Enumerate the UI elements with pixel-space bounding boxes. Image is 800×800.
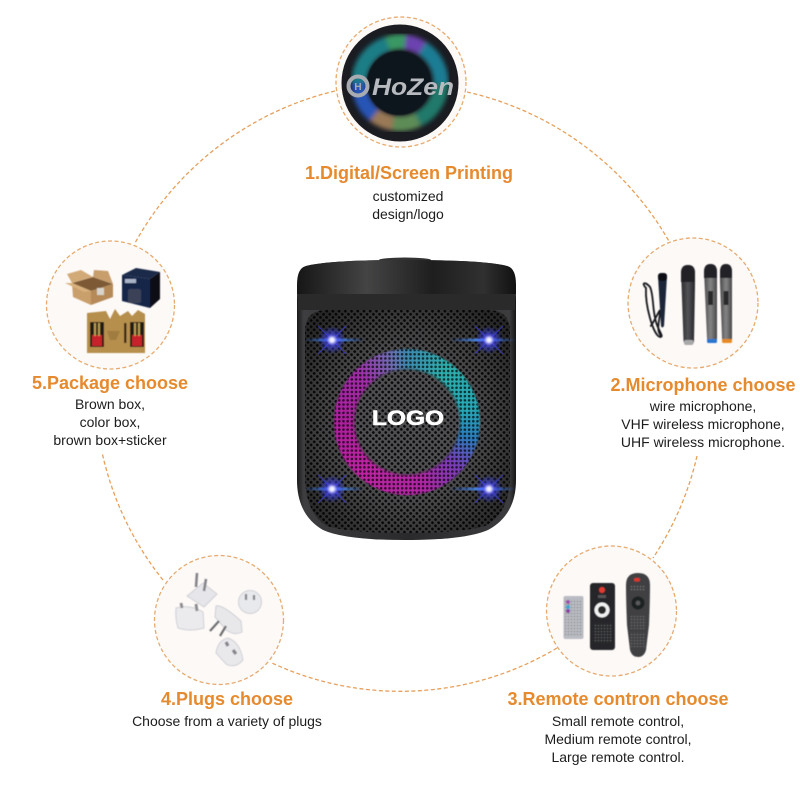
option 4 icon: plug adapters: [154, 556, 284, 684]
option 3 description: Large remote control.: [551, 749, 685, 765]
option 5 description: color box,: [80, 414, 140, 430]
option 2 icon: microphones: [628, 238, 758, 368]
option 5 description: [53, 396, 167, 448]
option 2 description: UHF wireless microphone.: [621, 434, 785, 450]
connecting dashed circle: printing to package: [135, 91, 335, 243]
top knob: [379, 258, 431, 262]
EU plug adapter: [176, 603, 204, 630]
top cap: [297, 260, 516, 294]
option 5 heading: 5.Package choose: [32, 373, 188, 393]
flare bottom right: [450, 475, 516, 503]
option 2 description: [621, 398, 785, 450]
connecting dashed circle: plugs to package: [102, 452, 163, 580]
medium black remote: [590, 583, 615, 650]
speaker logo text: LOGO: [372, 407, 444, 430]
option 4 description: Choose from a variety of plugs: [132, 713, 322, 729]
option 5 description: Brown box,: [75, 396, 145, 412]
handheld microphone black: [681, 265, 695, 345]
option 3 heading: 3.Remote contron choose: [507, 689, 729, 709]
option 1 description: design/logo: [372, 206, 444, 222]
flat brown box with sticker: [87, 309, 145, 353]
option 1 description: [372, 188, 444, 222]
option 3 description: Medium remote control,: [544, 731, 692, 747]
option 1 heading: 1.Digital/Screen Printing: [305, 163, 513, 183]
option 3 icon: remote controls: [546, 546, 676, 676]
option 5 icon: packaging boxes: [46, 241, 174, 369]
option 2 description: wire microphone,: [649, 398, 756, 414]
handheld microphone orange ring: [720, 264, 732, 343]
round plug adapter: [238, 590, 262, 614]
option 5 description: brown box+sticker: [53, 432, 167, 448]
logo emblem: H: [354, 82, 362, 93]
flare top left: [304, 326, 364, 354]
speaker grille: [305, 310, 510, 536]
US plug adapter: [187, 573, 217, 607]
connecting dashed circle: remote to plugs: [272, 648, 557, 691]
speaker light ring: [333, 348, 481, 496]
centre adapter with angled pins: [210, 606, 242, 636]
wired microphone: [644, 273, 667, 337]
option 3 description: Small remote control,: [552, 713, 684, 729]
option 3 description: [544, 713, 692, 765]
option 4 heading: 4.Plugs choose: [161, 689, 293, 709]
open brown box: [65, 270, 113, 305]
central speaker body: [297, 258, 516, 540]
large grey remote: [626, 573, 650, 657]
small silver remote: [564, 596, 584, 639]
connecting dashed circle: microphone to remote: [653, 456, 697, 558]
option 2 description: VHF wireless microphone,: [621, 416, 785, 432]
flare top right: [450, 326, 516, 354]
speaker light flares: [304, 326, 516, 503]
option 1 icon: HoZen logo speaker disc: [336, 17, 466, 147]
option 1 description: customized: [373, 188, 443, 204]
flare bottom left: [304, 475, 364, 503]
handheld microphone blue ring: [704, 264, 717, 343]
black colour box: [122, 268, 160, 308]
UK plug adapter: [216, 638, 243, 666]
connecting dashed circle: printing to microphone: [467, 92, 670, 243]
option 2 heading: 2.Microphone choose: [610, 375, 796, 395]
logo wordmark: HoZen: [372, 74, 454, 101]
